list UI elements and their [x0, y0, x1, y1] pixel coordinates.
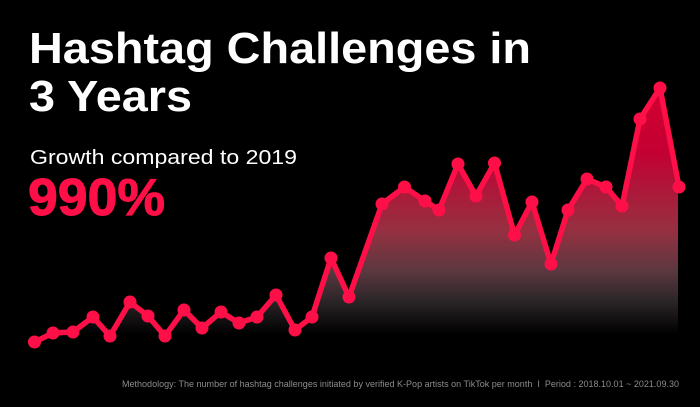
title	[29, 24, 531, 121]
chart line	[34, 88, 679, 342]
chart area fill	[34, 88, 678, 342]
area line chart	[28, 82, 686, 348]
chart data points	[28, 82, 686, 348]
methodology footnote: Methodology: The number of hashtag challenges initiated by verified K-Pop artists on TikTok per month I Period : 2018.10.01 ~ 2021.09.30	[122, 379, 679, 389]
title: Hashtag Challenges in	[29, 24, 531, 73]
title: 3 Years	[29, 72, 192, 121]
key figure: 990%: 990%	[28, 169, 165, 227]
subtitle: growth label: Growth compared to 2019	[30, 146, 297, 169]
